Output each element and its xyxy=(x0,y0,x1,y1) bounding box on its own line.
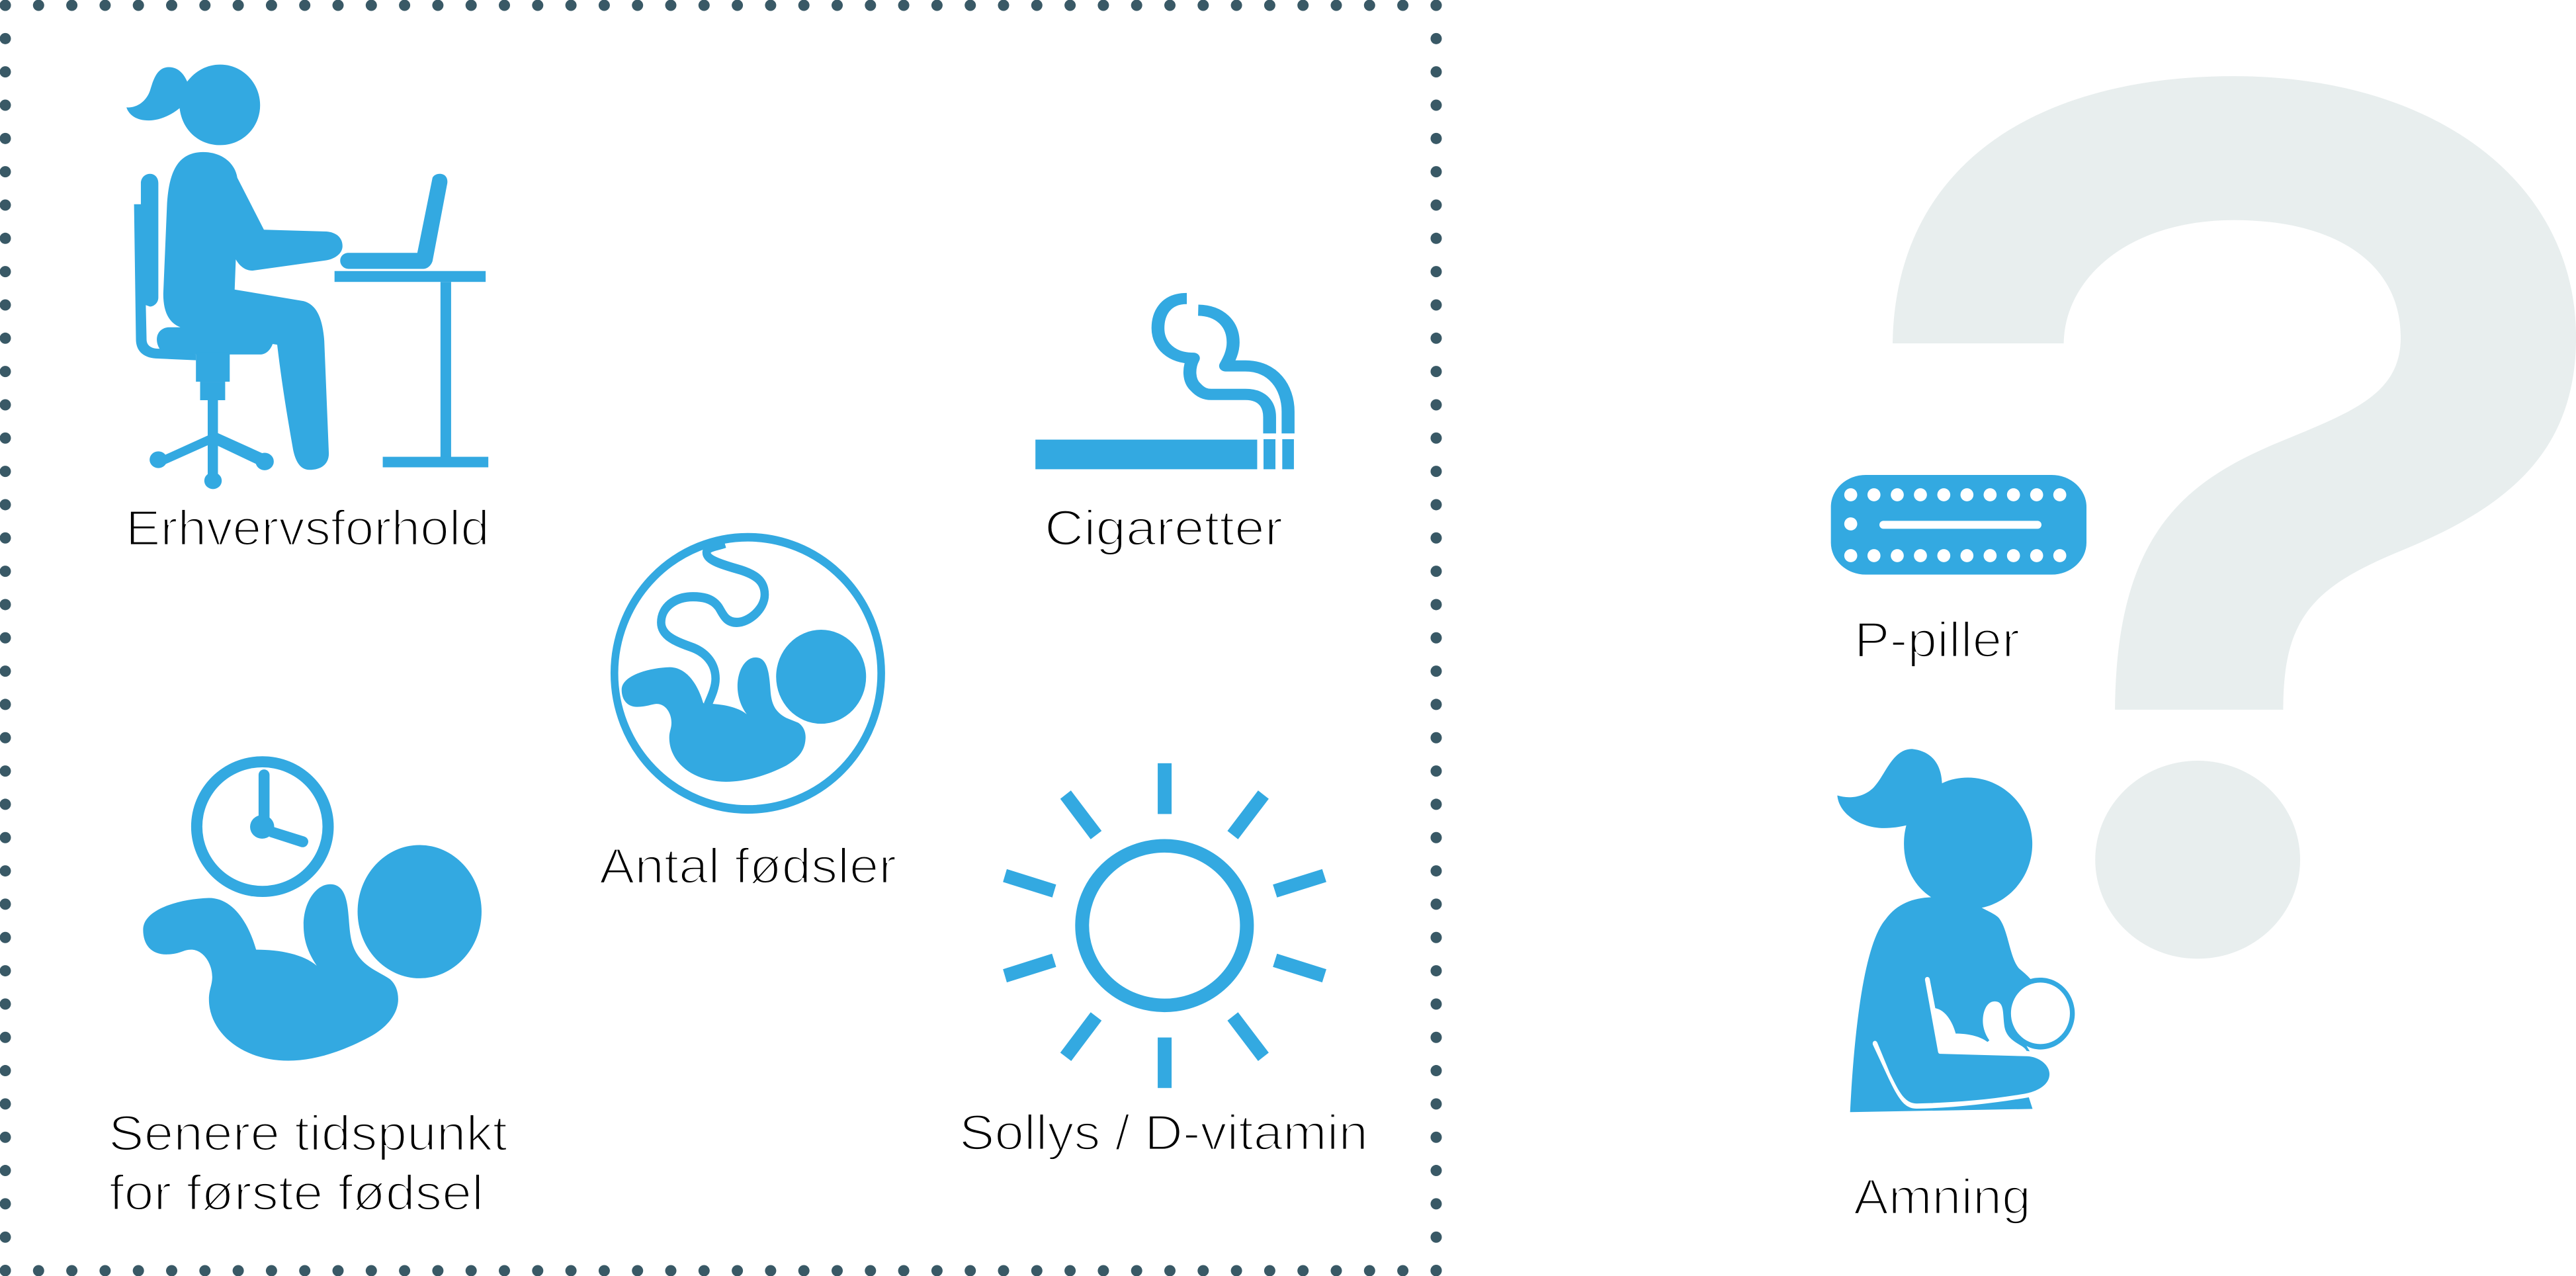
label: Antal fødsler: Antal fødsler xyxy=(599,838,896,894)
icon: fetus with clock xyxy=(143,756,482,1061)
icon: cigarette with smoke xyxy=(1035,298,1294,469)
label: Senere tidspunkt for første fødsel: for første fødsel xyxy=(109,1165,484,1220)
label: Sollys / D-vitamin: Sollys / D-vitamin xyxy=(959,1105,1368,1160)
panel: Erhvervsforhold xyxy=(126,65,490,556)
icon: birth control pill pack xyxy=(1831,475,2086,575)
question mark background xyxy=(1893,76,2576,958)
panel: Cigaretter xyxy=(1035,298,1294,556)
label: Cigaretter: Cigaretter xyxy=(1045,500,1283,556)
label: P-piller: P-piller xyxy=(1854,612,2020,667)
icon: fetus in a circle with umbilical cord xyxy=(615,537,881,810)
label: Senere tidspunkt for første fødsel: Senere tidspunkt xyxy=(108,1105,507,1161)
panel: Amning xyxy=(1837,749,2075,1224)
panel: Antal fødsler xyxy=(599,537,896,894)
panel: P-piller xyxy=(1831,475,2086,667)
icon: woman working at a desk with laptop xyxy=(126,65,488,489)
label: Erhvervsforhold: Erhvervsforhold xyxy=(126,500,490,556)
dotted frame xyxy=(5,5,1436,1271)
panel: Sollys / D-vitamin xyxy=(959,763,1368,1160)
label: Senere tidspunkt for første fødsel xyxy=(108,1105,507,1220)
icon: breastfeeding woman xyxy=(1837,749,2075,1112)
label: Amning: Amning xyxy=(1854,1169,2031,1224)
panel: Senere tidspunkt for første fødsel xyxy=(108,756,507,1220)
icon: sun xyxy=(1003,763,1326,1088)
